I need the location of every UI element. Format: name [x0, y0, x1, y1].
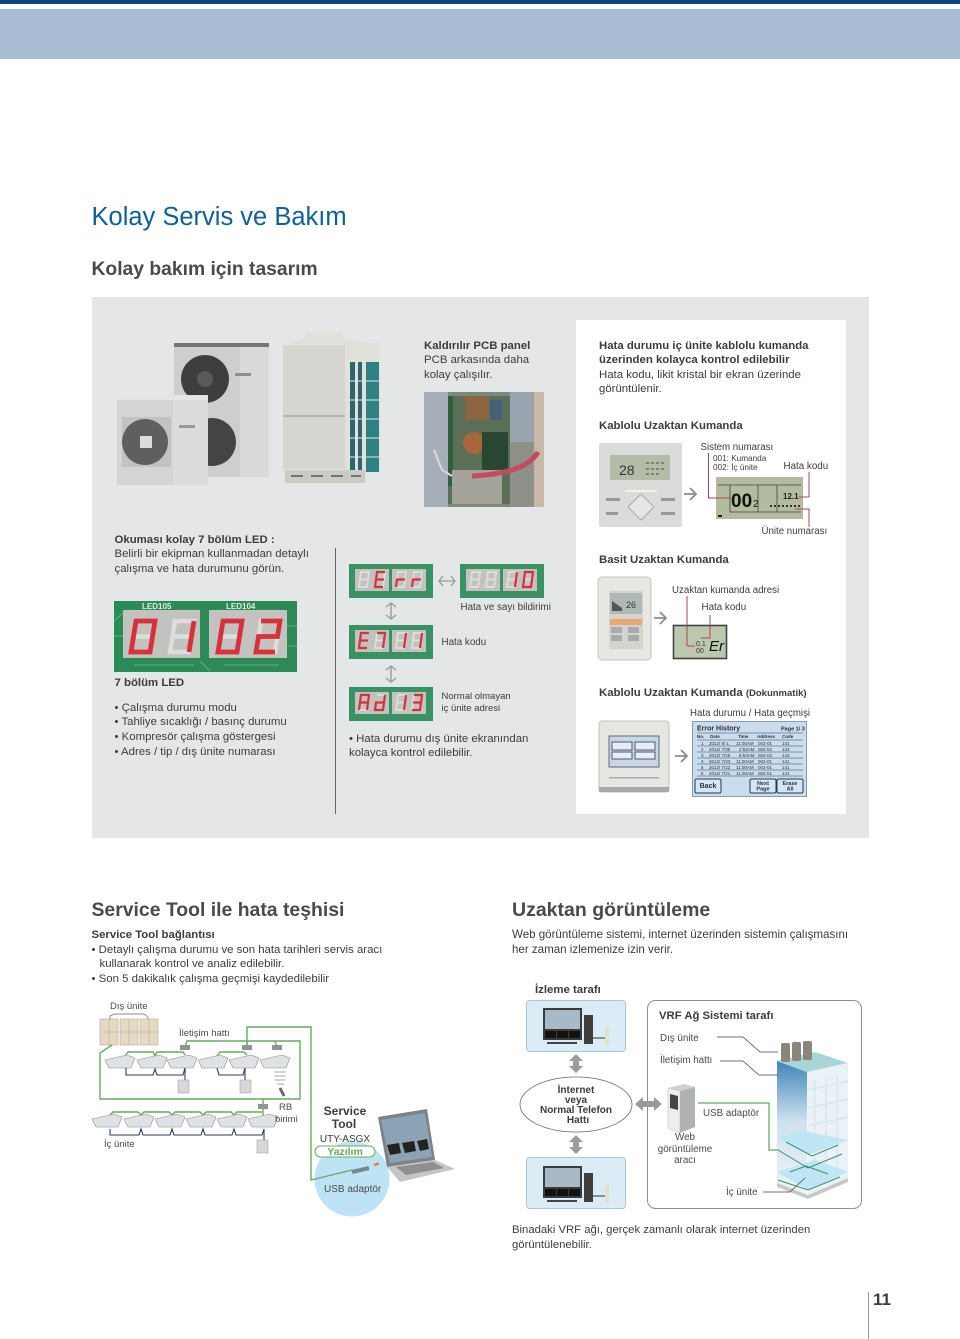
error history screen: 002-02	[758, 747, 773, 752]
RB units	[180, 1045, 282, 1109]
icon: wired remote LCD with callouts: 12.1	[783, 492, 799, 501]
list: LED features: • Çalışma durumu modu	[114, 702, 237, 714]
text: wired remote error status: Hata kodu, likit kristal bir ekran üzerinde	[599, 369, 801, 381]
heading: wired remote: Kablolu Uzaktan Kumanda	[599, 420, 743, 432]
internet ellipse: Normal Telefon	[540, 1105, 612, 1116]
image: PCB photo	[424, 392, 544, 507]
diagram labels: birimi	[275, 1114, 298, 1125]
wireless remote	[274, 1072, 286, 1096]
page number: 11	[873, 1290, 891, 1309]
text: service tool connection: • Detaylı çalışma durumu ve son hata tarihleri servis aracı	[92, 944, 382, 956]
error history screen: 2012/ 8/ 1	[709, 741, 730, 746]
error history screen: 143	[782, 753, 790, 758]
title: Kolay Servis ve Bakım	[92, 203, 347, 231]
error history screen: 11:00AM	[736, 771, 754, 776]
text: network caption	[512, 1224, 810, 1251]
signal lines	[110, 1068, 264, 1140]
text: service tool connection: • Son 5 dakikalık çalışma geçmişi kaydedilebilir	[92, 973, 329, 985]
outdoor units	[100, 1019, 158, 1045]
text: seven segment LED intro: çalışma ve hata durumunu görün.	[114, 563, 284, 575]
icon: simple remote controller: 26	[626, 600, 636, 610]
labels: Dış ünite	[660, 1033, 699, 1044]
VRF panel	[648, 1000, 862, 1208]
subtitle: Kolay bakım için tasarım	[92, 258, 318, 280]
icon: wired remote controller	[599, 443, 682, 527]
text: service tool connection	[92, 929, 382, 985]
text: wired remote error status: Hata durumu iç ünite kablolu kumanda	[599, 340, 808, 352]
label: abnormal indoor unit address	[442, 691, 511, 714]
label: error code: Hata kodu	[702, 602, 746, 613]
VRF panel: VRF Ağ Sistemi tarafı	[659, 1010, 773, 1022]
labels: Web	[675, 1132, 696, 1143]
text: service tool connection: Service Tool bağlantısı	[92, 929, 215, 941]
list: LED features: • Tahliye sıcaklığı / basınç durumu	[114, 716, 287, 728]
icon: simple remote controller	[598, 576, 652, 660]
icon: vertical double arrow	[386, 665, 396, 683]
panel: grey maintenance panel	[92, 297, 869, 838]
internet ellipse: Hattı	[567, 1115, 589, 1126]
error history screen: Erase	[782, 781, 798, 787]
error history screen: 2012/ 7/25	[709, 753, 731, 758]
error history screen: 8:53AM	[739, 753, 755, 758]
error history screen: Time	[738, 734, 749, 739]
LED display: Ad 13	[349, 687, 433, 721]
leader lines	[717, 1037, 805, 1192]
error history screen: 002-01	[758, 771, 773, 776]
label: system number values: 002: İç ünite	[713, 463, 758, 472]
yazilim pill: Yazılım	[327, 1146, 363, 1158]
text: network caption: Binadaki VRF ağı, gerçek zamanlı olarak internet üzerinden	[512, 1224, 810, 1236]
error history screen: 11:00AM	[736, 759, 754, 764]
icon: touch remote controller	[598, 720, 670, 792]
rooftop outdoor units	[781, 1041, 812, 1062]
diagram labels: İç ünite	[104, 1139, 135, 1150]
communication lines	[100, 1027, 352, 1180]
error history screen: 141	[782, 741, 790, 746]
error history screen: 141	[782, 771, 790, 776]
text: removable PCB panel: PCB arkasında daha	[424, 354, 529, 366]
error history screen: 5	[701, 765, 704, 770]
text: wired remote error status	[599, 340, 809, 395]
error history screen: 002-01	[758, 741, 773, 746]
text: outdoor display note	[349, 732, 528, 759]
error history screen: 6	[701, 771, 704, 776]
icon: simple remote LCD: 0.1	[696, 641, 706, 648]
error history screen: Code	[782, 734, 794, 739]
labels	[658, 1033, 760, 1198]
text: service tool connection: kullanarak kontrol ve analiz edilebilir.	[100, 958, 284, 970]
image: outdoor units	[117, 333, 380, 485]
service tool labels: UTY-ASGX	[320, 1134, 370, 1145]
text: seven segment LED intro: Belirli bir ekipman kullanmadan detaylı	[114, 548, 309, 560]
text: remote monitoring intro: Web görüntüleme sistemi, internet üzerinden sistemin çalışmasını	[512, 929, 848, 941]
labels: USB adaptör	[703, 1108, 760, 1119]
error history screen: 002-02	[758, 753, 773, 758]
label: unit number: Ünite numarası	[762, 526, 827, 537]
laptop	[378, 1109, 455, 1182]
icon: vertical double arrow	[386, 602, 396, 620]
icon: arrow	[675, 750, 688, 762]
text: wired remote error status: görüntülenir.	[599, 383, 662, 395]
panel: white remote controller panel	[576, 320, 846, 814]
list: LED features	[114, 702, 287, 758]
usb bubble	[314, 1142, 390, 1216]
error history screen: 11:00AM	[736, 765, 754, 770]
label: error code: Hata kodu	[784, 461, 828, 472]
vertical gray arrows	[569, 1054, 583, 1154]
label: monitoring side: İzleme tarafı	[535, 984, 601, 996]
label: error and count: Hata ve sayı bildirimi	[460, 602, 551, 612]
label: system number values: 001: Kumanda	[713, 454, 766, 462]
service tool labels: Tool	[332, 1117, 356, 1131]
service tool labels	[320, 1104, 370, 1145]
text: remote monitoring intro	[512, 929, 848, 956]
error history screen: Error History	[697, 726, 740, 732]
LED display: 10	[460, 564, 544, 598]
text: outdoor display note: • Hata durumu dış ünite ekranından	[349, 732, 528, 744]
server	[668, 1084, 695, 1133]
error history screen: 141	[782, 765, 790, 770]
internet ellipse: veya	[565, 1095, 588, 1106]
label: abnormal indoor unit address: iç ünite adresi	[442, 703, 500, 714]
text: seven segment LED intro	[114, 534, 309, 575]
icon: simple remote LCD	[672, 596, 728, 660]
error history screen: Page 1/ 3	[781, 726, 805, 732]
icon: wired remote LCD with callouts: 00	[731, 491, 752, 512]
monitoring panel top	[526, 1000, 626, 1052]
text: wired remote error status: üzerinden kolayca kontrol edilebilir	[599, 354, 790, 366]
image: large LED board: LED105	[142, 602, 172, 611]
monitoring panel bottom	[526, 1158, 626, 1208]
labels: İletişim hattı	[660, 1055, 712, 1066]
error history screen: Next	[757, 781, 769, 787]
error history screen: 141	[782, 759, 790, 764]
icon: wired remote LCD with callouts: 2	[753, 499, 759, 510]
error history screen: 2	[701, 747, 704, 752]
label: system number values	[713, 454, 766, 472]
icon: simple remote LCD: 00	[696, 648, 704, 655]
heading: remote monitoring: Uzaktan görüntüleme	[512, 898, 710, 920]
text: removable PCB panel: Kaldırılır PCB panel	[424, 340, 530, 352]
error history screen: 2:53AM	[739, 747, 755, 752]
error history screen: 002-01	[758, 765, 773, 770]
usb adapter cable	[352, 1164, 379, 1172]
error history screen: 143	[782, 747, 790, 752]
service tool labels: Service	[324, 1104, 367, 1118]
text: removable PCB panel: kolay çalışılır.	[424, 369, 492, 381]
error history screen: No.	[697, 734, 704, 739]
text: LED heading: 7 bölüm LED	[114, 676, 184, 688]
error history screen: Date	[710, 734, 720, 739]
heading: simple remote: Basit Uzaktan Kumanda	[599, 554, 729, 566]
wired controllers	[178, 1080, 268, 1153]
text: network caption: görüntülenebilir.	[512, 1239, 592, 1251]
label: error status and history: Hata durumu / Hata geçmişi	[690, 708, 810, 718]
image: large LED board: LED104	[226, 602, 256, 611]
image: large LED board	[114, 601, 297, 672]
error history screen	[692, 721, 807, 797]
label: system number: Sistem numarası	[700, 442, 773, 452]
indoor cassette units row 1	[105, 1055, 290, 1068]
error history screen: 2012/ 7/21	[709, 771, 731, 776]
diagram labels	[104, 1001, 382, 1195]
icon: arrow	[684, 488, 698, 500]
diagram: service tool wiring	[92, 1001, 455, 1216]
error history screen: Back	[700, 783, 716, 790]
icon: arrow	[654, 612, 668, 624]
list: LED features: • Kompresör çalışma göstergesi	[114, 731, 276, 743]
label: remote address: Uzaktan kumanda adresi	[672, 584, 779, 596]
internet ellipse: İnternet	[558, 1083, 595, 1096]
error history screen: 002-01	[758, 759, 773, 764]
error history screen: 1	[701, 741, 704, 746]
error history screen: 2012/ 7/22	[709, 765, 731, 770]
building	[777, 1052, 848, 1199]
heading: service tool: Service Tool ile hata teşhisi	[92, 898, 344, 920]
labels: aracı	[674, 1155, 696, 1166]
error history screen: Address	[757, 734, 776, 739]
labels: İç ünite	[726, 1187, 758, 1198]
header band	[0, 0, 960, 59]
text: outdoor display note: kolayca kontrol edilebilir.	[349, 747, 472, 759]
heading: touch remote: Kablolu Uzaktan Kumanda (Dokunmatik)	[599, 687, 807, 699]
diagram labels: İletişim hattı	[179, 1028, 230, 1039]
text: seven segment LED intro: Okuması kolay 7 bölüm LED :	[114, 534, 275, 546]
diagram labels: Dış ünite	[110, 1001, 148, 1012]
green network line	[698, 1103, 779, 1150]
internet ellipse	[520, 1077, 632, 1132]
error history screen: 2012/ 7/30	[709, 747, 731, 752]
error history screen: 2012/ 7/23	[709, 759, 731, 764]
text: remote monitoring intro: her zaman izlemenize izin verir.	[512, 944, 673, 956]
LED display: E7 11	[349, 625, 433, 659]
labels: görüntüleme	[658, 1144, 713, 1155]
yazilim pill	[315, 1146, 375, 1158]
diagram labels: USB adaptör	[324, 1184, 382, 1195]
diagram labels: RB	[279, 1102, 292, 1113]
icon: horizontal double arrow	[438, 576, 456, 586]
indoor cassette units row 2	[92, 1114, 278, 1127]
LED display: Err	[349, 564, 433, 598]
icon: wired remote LCD with callouts	[708, 453, 810, 527]
label: error code: Hata kodu	[442, 636, 486, 648]
error history screen: 11:00AM	[736, 741, 754, 746]
diagram: remote monitoring	[520, 1000, 862, 1209]
error history screen: All	[786, 786, 794, 792]
list: LED features: • Adres / tip / dış ünite numarası	[114, 746, 276, 758]
icon: simple remote LCD: Er	[709, 638, 725, 655]
label: abnormal indoor unit address: Normal olmayan	[442, 691, 511, 702]
error history screen: Page	[756, 786, 770, 792]
horizontal gray arrow	[635, 1097, 662, 1111]
error history screen: 3	[701, 753, 704, 758]
error history screen: 4	[701, 759, 704, 764]
icon: wired remote controller: 28	[619, 462, 635, 478]
divider	[335, 548, 336, 814]
text: removable PCB panel	[424, 340, 530, 381]
